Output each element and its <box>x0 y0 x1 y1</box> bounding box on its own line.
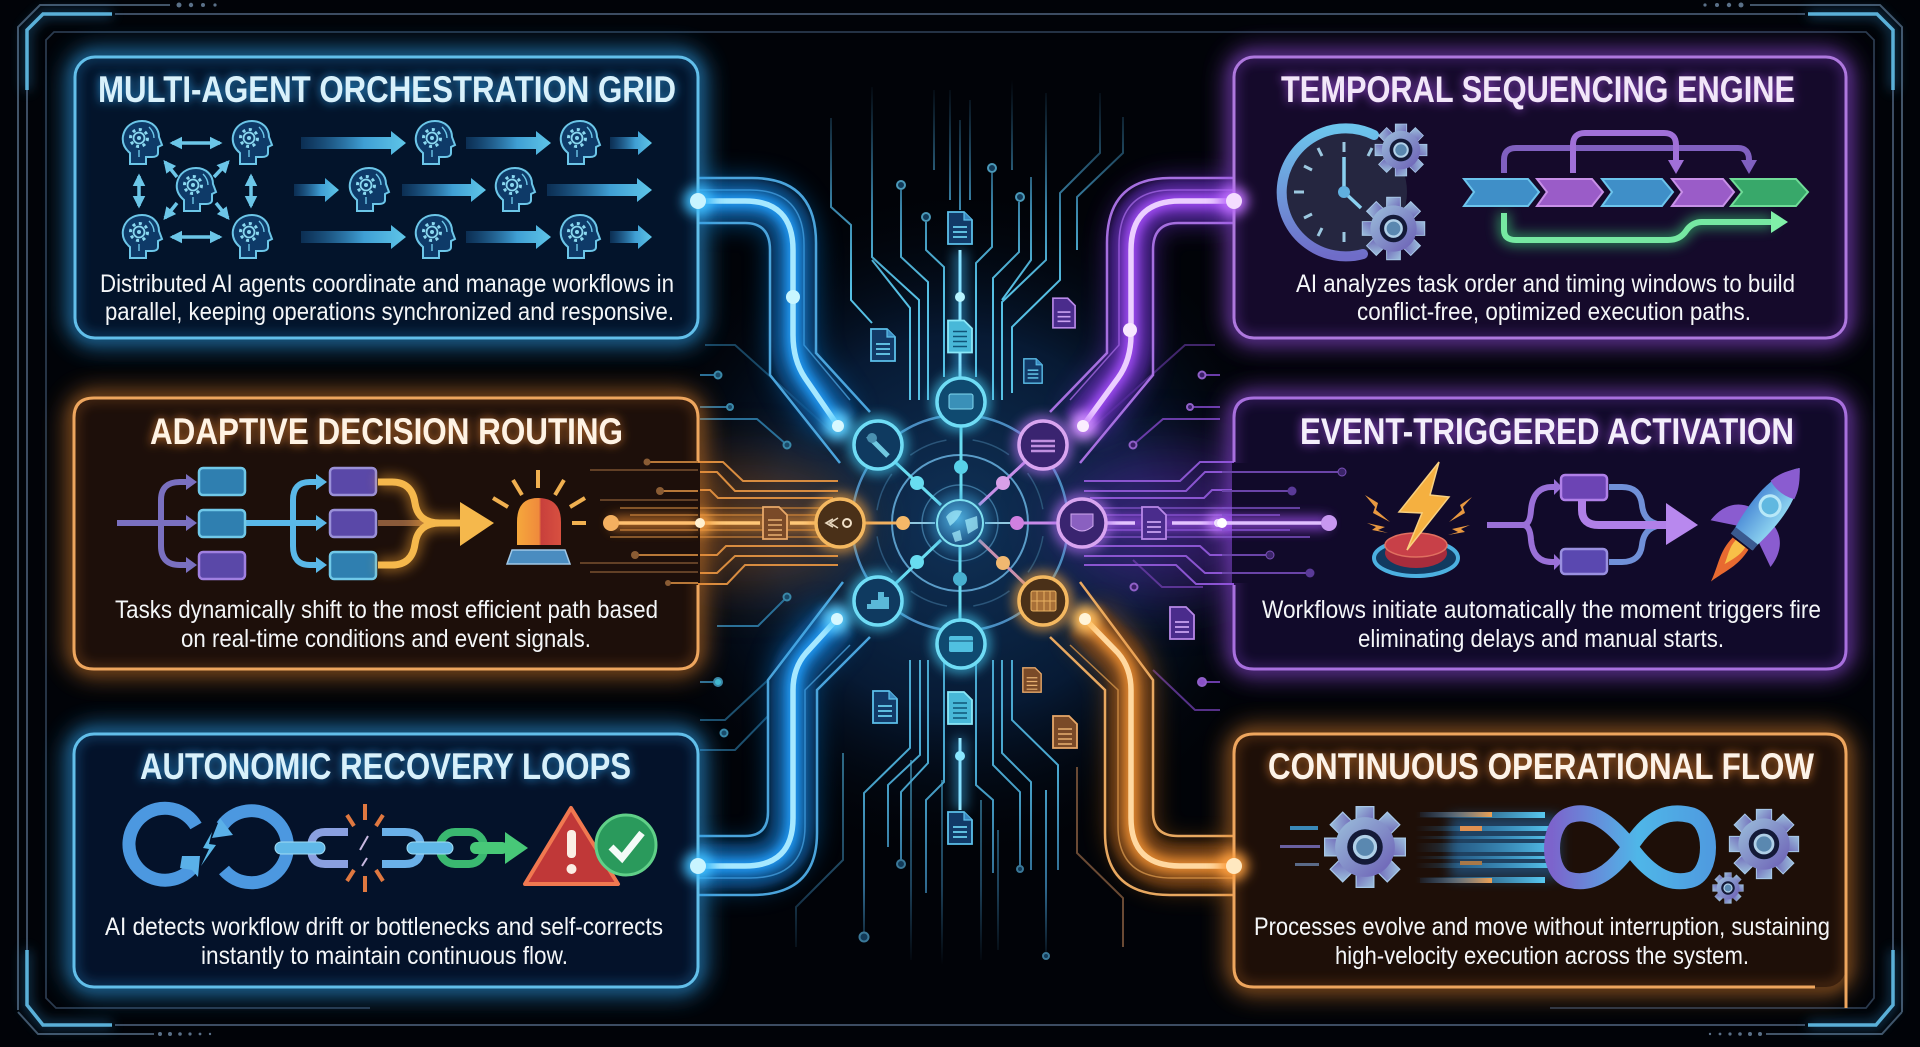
globe <box>930 493 990 553</box>
icon: infinity loop <box>1552 813 1708 881</box>
icon: right gear <box>1729 809 1799 879</box>
purple horizontal circuit bundle <box>1084 462 1342 584</box>
panel: event-triggered activation <box>1217 398 1846 669</box>
document icons <box>763 212 1194 844</box>
description: instantly to maintain continuous flow. <box>201 942 568 970</box>
node: lower right <box>1019 577 1067 625</box>
panel border <box>1234 734 1846 1008</box>
icon: warning triangle <box>525 808 618 884</box>
node: bottom <box>937 620 985 668</box>
node: right <box>1058 499 1106 547</box>
pipe: temporal sequencing to hub <box>1050 178 1234 463</box>
signal streaks inside panel <box>580 458 705 586</box>
heading: TEMPORAL SEQUENCING ENGINE <box>1281 69 1795 110</box>
orange horizontal circuit bundle <box>611 462 840 584</box>
heading: ADAPTIVE DECISION ROUTING <box>150 411 623 452</box>
description: Workflows initiate automatically the moment triggers fire <box>1262 596 1821 624</box>
heading: EVENT-TRIGGERED ACTIVATION <box>1300 411 1794 452</box>
connection dots on panel edges <box>684 187 1248 880</box>
panel: multi-agent orchestration grid <box>75 57 698 338</box>
panel border <box>1234 398 1846 669</box>
description: Processes evolve and move without interruption, sustaining <box>1254 913 1830 941</box>
icon: rocket <box>1681 445 1830 605</box>
description <box>1262 596 1821 653</box>
description: high-velocity execution across the system. <box>1335 942 1749 970</box>
panel: temporal sequencing engine <box>1234 57 1846 338</box>
description <box>105 913 663 970</box>
icon: green check <box>596 815 656 875</box>
pipe: recovery loops to hub <box>698 582 870 895</box>
icon: clock and gears <box>1281 124 1427 260</box>
icon: branching flow arrow <box>1487 475 1698 574</box>
description: Tasks dynamically shift to the most efficient path based <box>115 596 658 624</box>
description: parallel, keeping operations synchronized and responsive. <box>105 298 674 326</box>
description: Distributed AI agents coordinate and manage workflows in <box>100 270 674 298</box>
icon: alarm siren <box>493 470 586 564</box>
node: upper left <box>854 421 902 469</box>
icon: small gear <box>1713 873 1743 903</box>
heading: MULTI-AGENT ORCHESTRATION GRID <box>98 69 676 110</box>
chart: sequence chevrons with routing arrows <box>1464 133 1808 240</box>
description: on real-time conditions and event signals. <box>181 625 591 653</box>
node: left <box>816 499 864 547</box>
hub spokes <box>864 426 1058 620</box>
icon: motion streaks <box>1280 812 1560 883</box>
description <box>115 596 658 653</box>
panel: adaptive decision routing <box>74 398 705 669</box>
hub rings <box>852 415 1068 631</box>
icon: broken chain and arrow <box>275 804 528 892</box>
node: upper right <box>1019 421 1067 469</box>
icon: left gear <box>1325 807 1405 887</box>
description <box>100 270 674 326</box>
icon: recovery loops <box>129 808 287 883</box>
hub connector dots <box>896 460 1024 586</box>
description: conflict-free, optimized execution paths. <box>1357 298 1751 326</box>
pipe: multi-agent to hub <box>698 178 870 463</box>
hub node glow <box>816 378 1106 668</box>
icon: routing flow <box>117 468 494 579</box>
circuit traces: bottom <box>796 660 1123 970</box>
panel: autonomic recovery loops <box>74 734 698 987</box>
central hub <box>816 378 1106 668</box>
node: top <box>937 378 985 426</box>
icon: agent heads and flow arrows <box>123 121 652 258</box>
panel border <box>74 398 698 669</box>
heading: AUTONOMIC RECOVERY LOOPS <box>140 746 631 787</box>
panel: continuous operational flow <box>1234 734 1846 1008</box>
signal streaks inside panel <box>1217 463 1346 583</box>
icon: trigger button with lightning <box>1365 462 1472 576</box>
description: AI detects workflow drift or bottlenecks and self-corrects <box>105 913 663 941</box>
circuit traces: top <box>831 70 1123 400</box>
pipe: continuous flow to hub <box>1050 582 1234 895</box>
node: lower left <box>854 577 902 625</box>
description: eliminating delays and manual starts. <box>1358 625 1724 653</box>
circuit traces: left and right <box>700 345 1220 750</box>
heading: CONTINUOUS OPERATIONAL FLOW <box>1268 746 1814 787</box>
description <box>1254 913 1830 970</box>
description <box>1296 270 1795 326</box>
description: AI analyzes task order and timing windows to build <box>1296 270 1795 298</box>
